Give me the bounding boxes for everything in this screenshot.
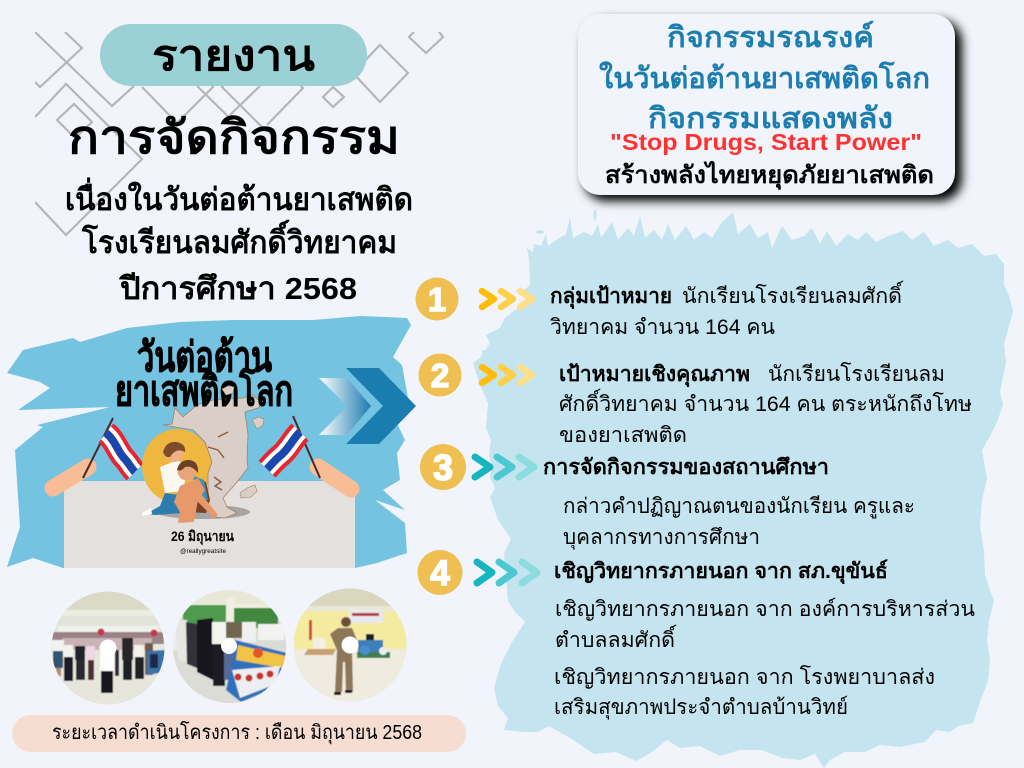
step 4 text: เชิญวิทยากรภายนอก จาก สภ.ขุขันธ์: [554, 559, 888, 585]
step 1 badge: [416, 278, 458, 320]
duration pill: ระยะเวลาดำเนินโครงการ : เดือน มิถุนายน 2568: [52, 721, 422, 745]
smoke puff over heading: [222, 386, 234, 395]
campaign title card: กิจกรรมรณรงค์: [667, 20, 874, 54]
subtitle block: ปีการศึกษา 2568: [119, 271, 357, 306]
step 1 text: นักเรียนโรงเรียนลมศักดิ์: [682, 280, 904, 308]
illustration: children and drug smoke: [142, 395, 264, 523]
photo: assembly group: [50, 590, 166, 706]
campaign title card: สร้างพลังไทยหยุดภัยยาเสพติด: [605, 160, 934, 191]
step 3 text: บุคลากรทางการศึกษา: [563, 526, 760, 550]
step 3 chevrons: [475, 457, 534, 477]
poster heading: ยาเสพติดโลก: [115, 367, 293, 414]
step 2 text: [559, 362, 972, 447]
campaign title card: [578, 14, 962, 201]
step 3 text: กล่าวคำปฏิญาณตนของนักเรียน ครูและ: [563, 495, 915, 519]
step 2 text: เป้าหมายเชิงคุณภาพ: [559, 362, 750, 388]
chevron arrow pair: [319, 368, 416, 444]
step 2 badge: 2: [431, 357, 449, 394]
step 1 text: กลุ่มเป้าหมาย: [550, 284, 672, 310]
photo: line-up with banner: [172, 589, 288, 705]
step 2 text: ศักดิ์วิทยาคม จำนวน 164 คน ตระหนักถึงโทษ: [559, 388, 972, 416]
step 4 text: เสริมสุขภาพประจำตำบลบ้านวิทย์: [554, 695, 848, 720]
poster: anti-drug day: [7, 316, 416, 568]
poster date: 26 มิถุนายน: [171, 528, 234, 545]
step 1 chevrons: [482, 291, 532, 307]
campaign title card: กิจกรรมแสดงพลัง: [648, 103, 893, 135]
step 3 badge: 3: [433, 447, 453, 488]
step 2 text: ของยาเสพติด: [559, 424, 687, 447]
icon: right arm and flag: [267, 416, 351, 489]
poster handle: @reallygreatsite: [180, 549, 227, 555]
photo: police speaker: [292, 586, 410, 704]
step 1 text: [550, 280, 904, 339]
step 3 heading: การจัดกิจกรรมของสถานศึกษา: [543, 456, 829, 479]
icon: left arm and flag: [53, 418, 135, 488]
subtitle block: [65, 177, 413, 306]
poster heading: [115, 334, 293, 414]
photo centre hole: [221, 638, 237, 654]
step 1 text: วิทยาคม จำนวน 164 คน: [550, 316, 775, 339]
campaign title card: ในวันต่อต้านยาเสพติดโลก: [599, 60, 930, 95]
poster grey panel: [64, 481, 355, 568]
step 4 badge: [418, 550, 462, 595]
step 4 text: เชิญวิทยากรภายนอก จาก องค์การบริหารส่วน: [555, 597, 975, 621]
step 2 badge: [418, 354, 462, 396]
step 2 text: นักเรียนโรงเรียนลม: [768, 362, 945, 386]
step 4 badge: 4: [430, 554, 450, 593]
photo centre hole: [342, 636, 358, 654]
step 4 text: [554, 559, 975, 720]
step 4 text: เชิญวิทยากรภายนอก จาก โรงพยาบาลส่ง: [554, 665, 935, 689]
step 3 text: [563, 495, 915, 550]
step 1 badge: 1: [428, 281, 446, 318]
step 3 badge: [420, 444, 466, 490]
top pill badge: report: [100, 24, 367, 86]
campaign title card: "Stop Drugs, Start Power": [610, 129, 922, 155]
photo centre hole: [100, 640, 116, 656]
geometric background pattern: [35, 32, 443, 235]
step 4 text: ตำบลลมศักดิ์: [555, 624, 677, 652]
duration pill: [12, 715, 466, 752]
top pill badge: report: รายงาน: [152, 32, 315, 79]
main title: การจัดกิจกรรม: [68, 111, 400, 163]
step 2 chevrons: [482, 367, 532, 383]
poster brush background: [7, 316, 411, 568]
subtitle block: เนื่องในวันต่อต้านยาเสพติด: [65, 177, 413, 217]
step 4 chevrons: [477, 562, 537, 583]
subtitle block: โรงเรียนลมศักดิ์วิทยาคม: [81, 219, 397, 260]
right content panel: brushed background: [473, 209, 1013, 768]
poster heading: วันต่อต้าน: [137, 334, 272, 380]
